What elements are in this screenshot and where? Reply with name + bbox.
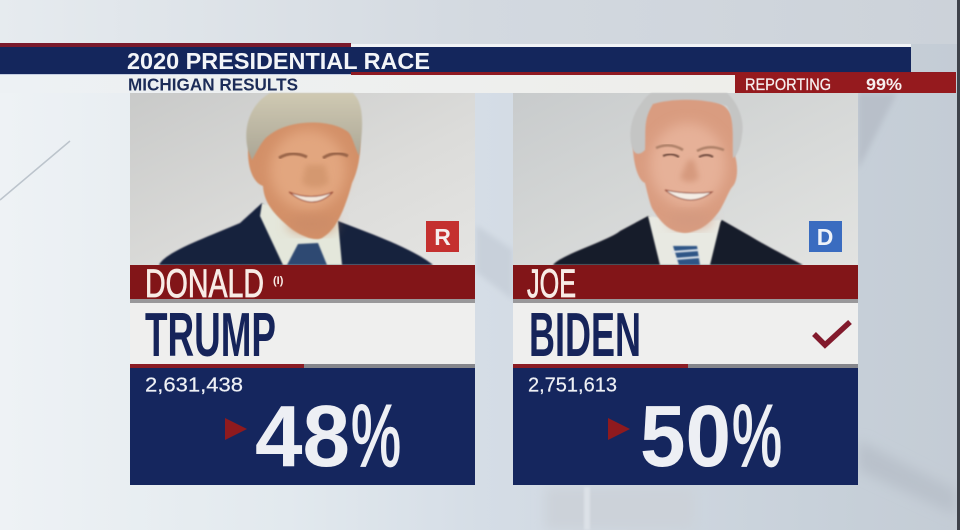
results box: %	[351, 386, 401, 485]
last name band: TRUMP	[145, 301, 276, 370]
results box: 2,751,613	[528, 374, 617, 396]
icon: check mark	[814, 322, 850, 345]
panel: Biden	[513, 93, 858, 485]
reporting box	[735, 73, 956, 94]
reporting box: 99%	[866, 76, 902, 94]
first name band	[513, 262, 858, 306]
results box: %	[732, 386, 782, 485]
portrait: Trump	[130, 93, 475, 265]
results box: 50	[640, 388, 731, 485]
results box: 48	[255, 388, 350, 485]
party badge D	[809, 221, 842, 252]
first name band: JOE	[527, 262, 576, 306]
party badge R	[426, 221, 459, 252]
first name band	[130, 262, 475, 306]
vote share bar	[130, 364, 475, 368]
arrow marker	[225, 418, 247, 440]
last name band: BIDEN	[529, 301, 641, 370]
results box	[130, 368, 475, 485]
party badge D: D	[817, 224, 833, 250]
panel: Trump	[130, 93, 475, 485]
results box	[513, 368, 858, 485]
subtitle strip: MICHIGAN RESULTS	[128, 74, 298, 94]
first name band: DONALD	[145, 262, 264, 306]
arrow marker	[608, 418, 630, 440]
subtitle strip	[0, 74, 735, 94]
title: 2020 PRESIDENTIAL RACE	[127, 48, 430, 74]
results box: 2,631,438	[145, 374, 243, 396]
first name band: (I)	[273, 275, 284, 287]
reporting box: REPORTING	[745, 75, 831, 94]
party badge R: R	[434, 224, 451, 250]
vote share bar	[513, 364, 858, 368]
portrait: Biden	[513, 93, 858, 265]
last name band	[130, 301, 475, 370]
last name band	[513, 301, 858, 370]
header bar	[0, 43, 956, 76]
